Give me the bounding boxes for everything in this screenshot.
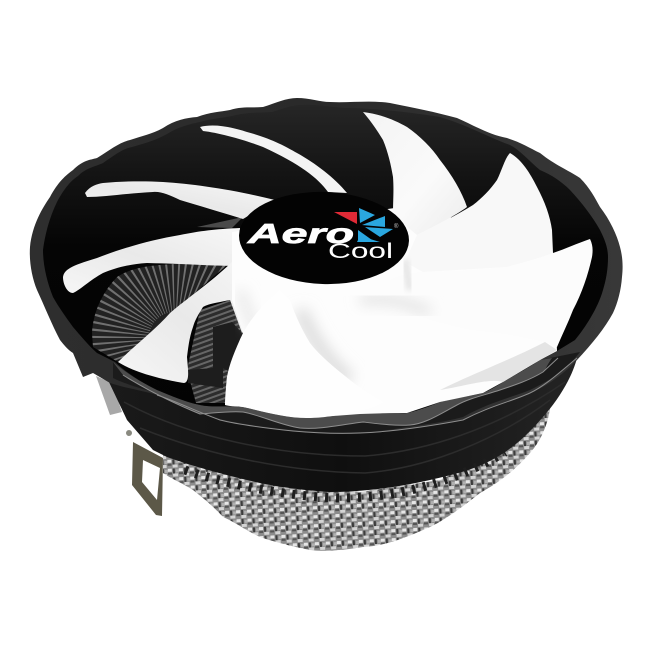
logo: Aero wordmark: Aero	[246, 218, 354, 249]
fan frame outer rim	[30, 98, 623, 433]
blade: lower right shading	[440, 342, 557, 390]
rim lower lip	[113, 352, 580, 432]
blade: left	[63, 228, 240, 293]
shroud grooves	[124, 382, 565, 473]
blade: upper left	[85, 181, 275, 219]
blade: right large	[390, 239, 593, 347]
blade soft shadows	[240, 260, 430, 380]
heatsink upper sliver	[197, 217, 243, 228]
mounting clip	[96, 376, 163, 516]
heatsink fins	[163, 408, 550, 551]
hub disc	[237, 189, 411, 287]
heatsink comb shadow	[185, 452, 505, 498]
screw	[126, 430, 132, 436]
fan interior	[43, 105, 608, 418]
logo: blue triangles	[357, 208, 393, 242]
illustration: CPU cooler with fan	[30, 98, 623, 551]
blade: white base underlay	[225, 205, 557, 418]
heatsink seen through fan, centre	[187, 300, 242, 403]
rim grey front band	[113, 358, 552, 428]
blade: thin top	[200, 126, 347, 193]
hub logo	[237, 189, 411, 287]
heatsink seen through fan, left	[92, 264, 226, 362]
thumb screw	[96, 376, 122, 415]
rim highlight lines	[123, 358, 577, 433]
blade: lower left	[118, 262, 262, 383]
blade: upper right	[405, 153, 553, 272]
black shroud band	[108, 358, 577, 492]
fan blades	[63, 112, 593, 418]
logo: red triangle	[334, 212, 357, 224]
logo: Cool wordmark: Cool	[328, 240, 393, 263]
clip frame	[132, 442, 163, 516]
motor strut	[188, 322, 242, 388]
blade: top right	[363, 112, 467, 235]
logo: registered mark: ®	[394, 223, 399, 230]
blade: bottom	[225, 290, 383, 418]
